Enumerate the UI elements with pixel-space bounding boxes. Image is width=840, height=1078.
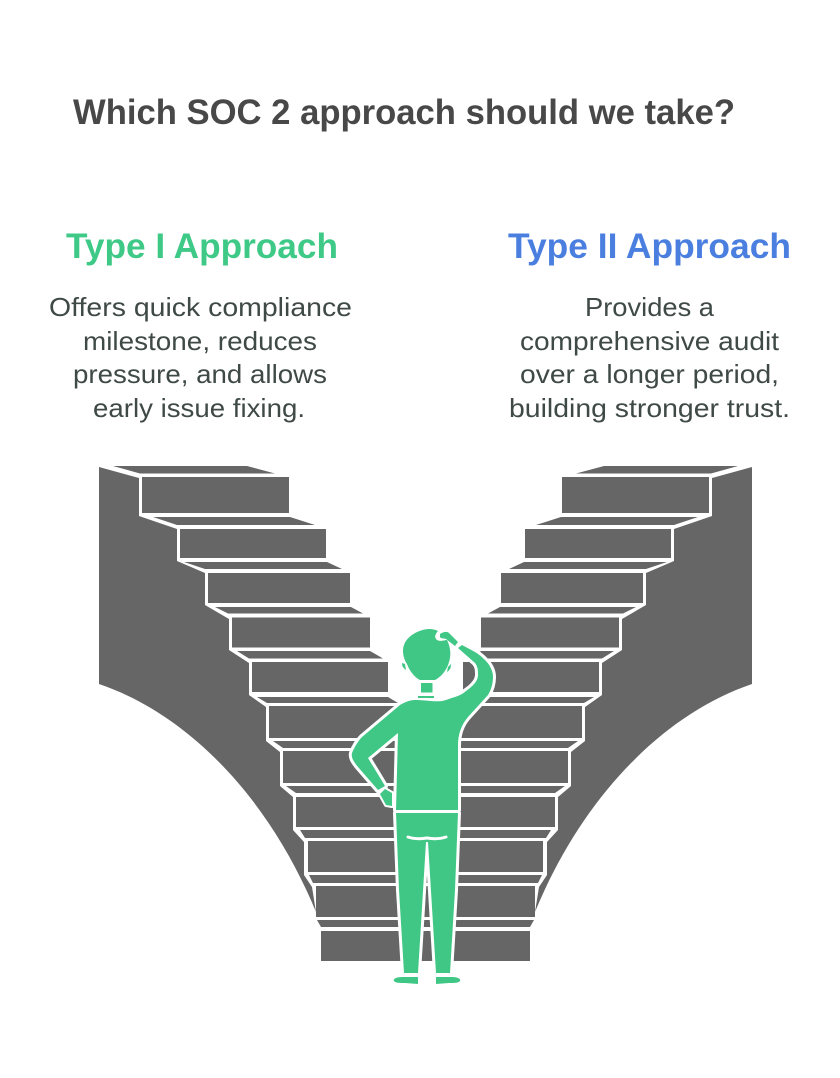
title: Which SOC 2 approach should we take? xyxy=(73,93,735,132)
panel: Type I text xyxy=(49,227,352,423)
text block: Type II description xyxy=(509,292,790,423)
text block: Type I description: pressure, and allows xyxy=(73,359,327,389)
person: raised hand xyxy=(440,632,458,646)
right upper steps xyxy=(453,466,738,703)
person: head xyxy=(403,629,450,680)
person: pocket line xyxy=(408,837,446,839)
person: trousers xyxy=(396,813,458,973)
person: left ear xyxy=(402,663,406,670)
text block: Type I description xyxy=(49,292,352,423)
heading: Type II Approach: Type II Approach xyxy=(508,227,791,266)
text block: Type II description: building stronger trust. xyxy=(509,393,790,423)
text block: Type II description: over a longer period, xyxy=(520,359,779,389)
right flight side wall xyxy=(535,467,752,912)
person: neck xyxy=(421,683,432,692)
text block: Type I description: Offers quick compliance xyxy=(49,292,352,322)
person: collar xyxy=(418,696,434,698)
text block: Type I description: early issue fixing. xyxy=(93,393,305,423)
panel: Type II text xyxy=(508,227,791,423)
person: right foot xyxy=(436,977,460,984)
person looking at the stairs xyxy=(352,629,493,984)
text block: Type II description: Provides a xyxy=(585,292,715,322)
person: hand on hip xyxy=(380,789,392,806)
shared lower steps xyxy=(269,706,582,961)
text block: Type II description: comprehensive audit xyxy=(520,326,780,356)
left upper steps xyxy=(113,466,398,703)
staircase: two diverging flights xyxy=(99,466,752,961)
text block: Type I description: milestone, reduces xyxy=(83,326,317,356)
left flight side wall xyxy=(99,467,316,912)
person: left foot xyxy=(394,977,418,984)
person: right ear xyxy=(447,664,451,672)
person: body and arms xyxy=(352,645,493,810)
heading: Type I Approach: Type I Approach xyxy=(66,227,338,266)
